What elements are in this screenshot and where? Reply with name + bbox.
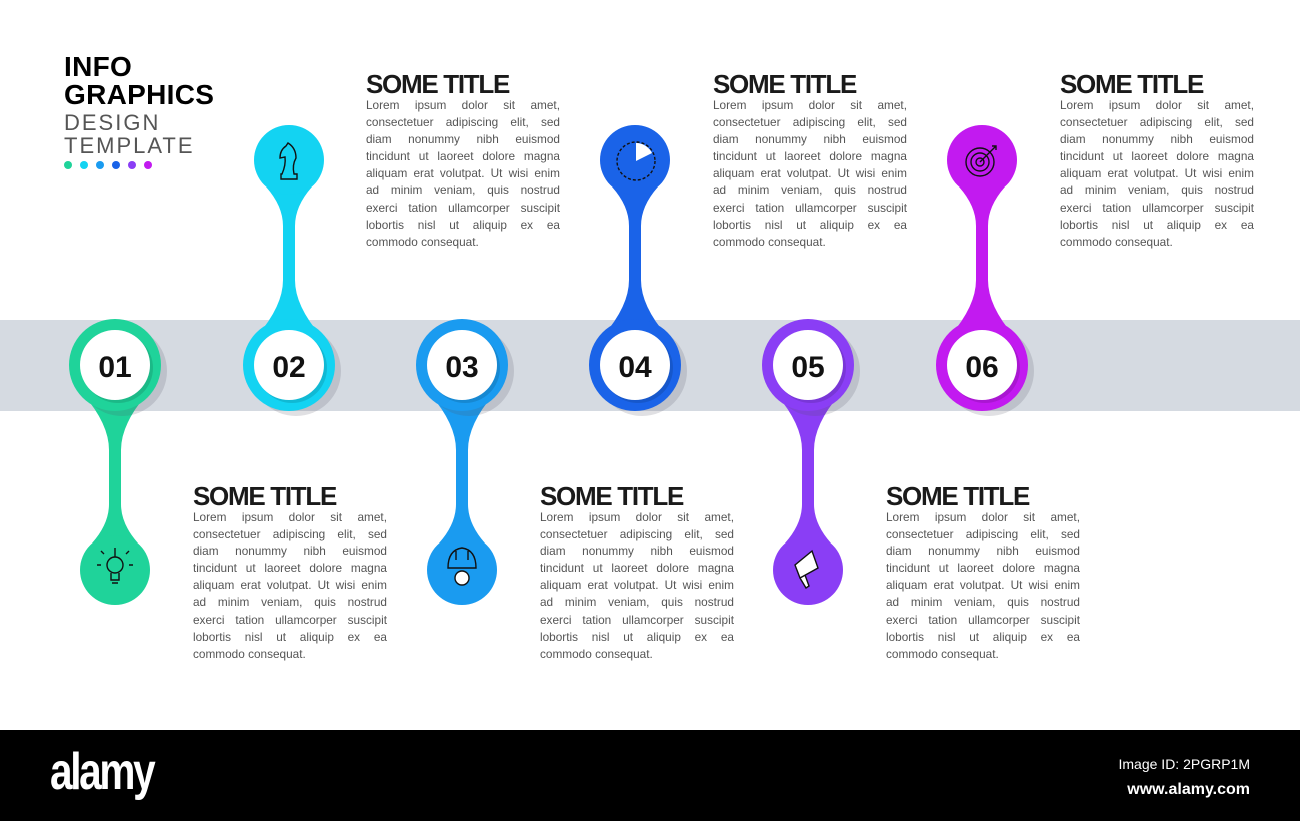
text block 04: ullamcorper [795,201,857,215]
text block 03: sit [677,510,689,524]
text block 04: dolore [829,149,862,163]
text block 05: laoreet [957,561,994,575]
text block 04: ea [894,218,907,232]
marker 06: 06 [965,351,999,384]
text block 01: laoreet [264,561,300,575]
text block 01: minim [218,595,249,609]
text block 06: nostrud [1215,183,1254,197]
text block 06: SOME TITLE [1060,69,1203,99]
text block 05: aliquam [886,578,927,592]
text block 05: ut [969,630,979,644]
text block 03: nonummy [582,544,634,558]
text block 06: ipsum [1109,98,1140,112]
logo: GRAPHICS [64,79,214,110]
text block 02: adipiscing [446,115,498,129]
text block 01: nostrud [348,595,387,609]
text block 06: suscipit [1215,201,1254,215]
text block 06: laoreet [1131,149,1168,163]
text block 02: ad [366,183,379,197]
text block 06: ea [1241,218,1254,232]
text block 02: minim [391,183,422,197]
text block 01: Ut [318,578,329,592]
text block 01: dolor [289,510,315,524]
text block 04: nisl [765,218,782,232]
text block 03: commodo consequat. [540,647,653,661]
text block 01: ad [193,595,206,609]
text block 06: commodo consequat. [1060,235,1173,249]
text block 06: enim [1228,166,1254,180]
text block 02: ullamcorper [448,201,510,215]
footer [0,730,1300,821]
text block 04: wisi [856,166,875,180]
text block 03: magna [698,561,734,575]
text block 05 [886,481,1080,661]
text block 04: minim [738,183,769,197]
logo: TEMPLATE [64,133,195,158]
text block 01 [193,481,387,661]
text block 05: SOME TITLE [886,481,1029,511]
text block 06: lobortis [1060,218,1098,232]
marker 05: 05 [791,351,825,384]
text block 03: nostrud [695,595,734,609]
text block 01: quis [314,595,336,609]
text block 02: Ut [491,166,502,180]
text block 04: ad [713,183,726,197]
text block 03: ut [593,561,603,575]
text block 02: veniam, [434,183,475,197]
text block 01: ullamcorper [275,613,337,627]
text block 05: consectetuer [886,527,954,541]
icon: target [966,146,996,176]
text block 04: lobortis [713,218,751,232]
text block 04: erat [760,166,781,180]
text block 04: commodo consequat. [713,235,826,249]
text block 05: nibh [996,544,1019,558]
text block 03: adipiscing [620,527,672,541]
text block 03: volutpat. [614,578,658,592]
text block 04: ut [796,218,806,232]
text block 05: erat [933,578,954,592]
text block 01: volutpat. [267,578,312,592]
text block 06: Ut [1185,166,1196,180]
text block 06: exerci [1060,201,1091,215]
text block 03: suscipit [695,613,734,627]
text block 05: enim [1054,578,1080,592]
text block 02: nostrud [521,183,560,197]
icon: megaphone [795,551,818,588]
text block 03: Lorem [540,510,573,524]
text block 02: sit [503,98,515,112]
footer id [1118,756,1250,798]
text block 03: nisl [592,630,609,644]
text block 03: ipsum [589,510,620,524]
text block 02: SOME TITLE [366,69,509,99]
text block 05: ex [1041,630,1053,644]
text block 06: wisi [1203,166,1222,180]
marker 06 [936,125,1034,416]
marker 04: 04 [618,351,652,384]
text block 03: elit, [684,527,703,541]
text block 03: amet, [704,510,734,524]
text block 01: consectetuer [193,527,261,541]
text block 02: laoreet [437,149,474,163]
text block 04: exerci [713,201,744,215]
text block 03: sed [715,527,734,541]
text block 04: veniam, [781,183,822,197]
text block 02: quis [487,183,509,197]
text block 02: tincidunt [366,149,410,163]
text block 01: exerci [193,613,224,627]
text block 06: Lorem [1060,98,1093,112]
text block 06: erat [1107,166,1128,180]
text block 05: ipsum [935,510,966,524]
text block 05: tincidunt [886,561,930,575]
text block 01: erat [240,578,261,592]
text block 05: suscipit [1041,613,1080,627]
text block 03: laoreet [611,561,648,575]
text block 02: tation [408,201,437,215]
icon: helmet gear [448,548,476,585]
text block 01: ut [276,630,286,644]
marker 01 [69,319,167,605]
text block 06: aliquip [1167,218,1201,232]
text block 02: dolore [482,149,515,163]
text block 05: euismod [1035,544,1080,558]
text block 06: ullamcorper [1142,201,1204,215]
text block 03: euismod [689,544,734,558]
text block 02: nibh [476,132,499,146]
text block 04: amet, [877,98,907,112]
logo [64,51,214,169]
text block 03: aliquip [647,630,681,644]
text block 01: wisi [336,578,355,592]
logo: INFO [64,51,132,82]
text block 03: Ut [665,578,676,592]
text block 04: Lorem [713,98,746,112]
text block 03: nibh [650,544,673,558]
marker 05 [762,319,860,605]
text block 04: quis [834,183,856,197]
text block 06: tincidunt [1060,149,1104,163]
text block 02: elit, [510,115,529,129]
text block 03: veniam, [608,595,649,609]
text block 04: enim [881,166,907,180]
text block 04: nibh [824,132,846,146]
text block 01: suscipit [348,613,387,627]
marker 01: 01 [98,351,132,384]
text block 01: tincidunt [193,561,237,575]
text block 06: sed [1235,115,1254,129]
text block 03: wisi [683,578,702,592]
text block 02: aliquip [473,218,507,232]
text block 02: ipsum [415,98,446,112]
text block 02: volutpat. [440,166,484,180]
text block 04: nostrud [868,183,907,197]
dots [64,161,152,169]
text block 01: ut [246,561,256,575]
text block 04: laoreet [784,149,820,163]
text block 06: ex [1215,218,1227,232]
text block 05: diam [886,544,912,558]
text block 06: dolore [1176,149,1209,163]
text block 04: diam [713,132,739,146]
text block 04: tincidunt [713,149,757,163]
text block 02: nonummy [408,132,460,146]
text block 02: consectetuer [366,115,434,129]
text block 02: magna [524,149,560,163]
text block 01: euismod [342,544,387,558]
text block 03 [540,481,734,661]
text block 04: suscipit [868,201,907,215]
text block 02: ut [449,218,459,232]
text block 02: diam [366,132,392,146]
text block 03: lobortis [540,630,578,644]
text block 05: nisl [938,630,955,644]
text block 06: diam [1060,132,1086,146]
text block 05: minim [911,595,942,609]
marker 02 [243,125,341,416]
text block 06: dolor [1156,98,1182,112]
text block 03: ut [623,630,633,644]
text block 06: veniam, [1128,183,1169,197]
text block 01: adipiscing [273,527,325,541]
text block 01: lobortis [193,630,231,644]
text block 03: diam [540,544,566,558]
text block 04: nonummy [755,132,807,146]
text block 01: tation [235,613,264,627]
text block 01: enim [361,578,387,592]
text block 05: nostrud [1041,595,1080,609]
text block 06: ut [1143,218,1153,232]
text block 01: dolore [309,561,342,575]
marker 04 [589,125,687,416]
text block 03: SOME TITLE [540,481,683,511]
text block 04: SOME TITLE [713,69,856,99]
text block 01: sed [368,527,387,541]
text block 04: aliquam [713,166,754,180]
text block 03: enim [708,578,734,592]
text block 04: sit [850,98,862,112]
text block 05: adipiscing [966,527,1018,541]
text block 05: Ut [1011,578,1022,592]
marker 02: 02 [272,351,306,384]
text block 01: elit, [337,527,356,541]
text block 06: euismod [1209,132,1254,146]
text block 02: exerci [366,201,397,215]
text block 06: ut [1113,149,1123,163]
text block 06: nibh [1170,132,1193,146]
text block 06: adipiscing [1140,115,1192,129]
text block 04: ut [766,149,776,163]
text block 01: commodo consequat. [193,647,306,661]
text block 01: ex [348,630,360,644]
text block 03: tincidunt [540,561,584,575]
text block 04: consectetuer [713,115,781,129]
text block 01: nonummy [235,544,287,558]
text block 03: exerci [540,613,571,627]
text block 04: ex [868,218,880,232]
text block 02: euismod [515,132,560,146]
text block 01: magna [351,561,387,575]
text block 04: adipiscing [793,115,845,129]
text block 02: enim [534,166,560,180]
text block 06: consectetuer [1060,115,1128,129]
text block 02: ex [521,218,533,232]
text block 04: sed [888,115,907,129]
text block 02 [366,69,560,249]
text block 05: wisi [1029,578,1048,592]
text block 02: sed [541,115,560,129]
text block 03: quis [661,595,683,609]
text block 06: quis [1181,183,1203,197]
text block 05: magna [1044,561,1080,575]
text block 01: nibh [304,544,326,558]
text block 04: euismod [862,132,907,146]
text block 04: elit, [857,115,876,129]
text block 03: ad [540,595,553,609]
text block 06: nonummy [1102,132,1154,146]
band [0,320,1300,411]
footer id: www.alamy.com [1127,781,1250,798]
text block 03: aliquam [540,578,581,592]
text block 06: magna [1218,149,1254,163]
text block 03: ullamcorper [622,613,684,627]
text block 02: lobortis [366,218,404,232]
text block 06: amet, [1224,98,1254,112]
text block 01: amet, [357,510,387,524]
text block 03: minim [565,595,596,609]
text block 06: volutpat. [1134,166,1178,180]
text block 04: tation [755,201,784,215]
text block 06: ad [1060,183,1073,197]
text block 01: SOME TITLE [193,481,336,511]
icon: bulb [97,548,133,583]
text block 05: ullamcorper [968,613,1030,627]
text block 02: ut [419,149,429,163]
text block 01: nisl [245,630,262,644]
text block 02: Lorem [366,98,399,112]
text block 05: ut [939,561,949,575]
text block 06: tation [1102,201,1131,215]
text block 02: wisi [509,166,528,180]
text block 04: ipsum [762,98,793,112]
footer id: Image ID: 2PGRP1M [1118,756,1250,772]
text block 05: dolor [982,510,1008,524]
text block 03: dolor [636,510,662,524]
text block 01: Lorem [193,510,226,524]
text block 01: ipsum [242,510,273,524]
text block 03: dolore [656,561,689,575]
text block 03: erat [587,578,608,592]
text block 01: diam [193,544,219,558]
text block 05: exerci [886,613,917,627]
text block 01: sit [330,510,342,524]
text block 06: minim [1085,183,1116,197]
text block 05: quis [1007,595,1029,609]
text block 04: volutpat. [787,166,832,180]
text block 05: sit [1023,510,1035,524]
text block 05: amet, [1050,510,1080,524]
text block 03: ea [721,630,734,644]
text block 05: commodo consequat. [886,647,999,661]
text block 02: ea [547,218,560,232]
text block 04: dolor [809,98,835,112]
text block 05: volutpat. [960,578,1004,592]
text block 05: aliquip [993,630,1027,644]
text block 04: magna [871,149,907,163]
text block 02: erat [413,166,434,180]
text block 02: aliquam [366,166,407,180]
text block 05: dolore [1002,561,1035,575]
text block 06: aliquam [1060,166,1101,180]
footer logo: alamy [50,743,153,801]
text block 01: ea [374,630,387,644]
text block 03: ex [695,630,707,644]
logo: DESIGN [64,110,160,135]
text block 05: sed [1061,527,1080,541]
text block 02: dolor [462,98,488,112]
text block 01: veniam, [261,595,302,609]
text block 02: amet, [530,98,560,112]
text block 05: tation [928,613,957,627]
text block 06 [1060,69,1254,249]
text block 05: lobortis [886,630,924,644]
text block 05: ea [1067,630,1080,644]
marker 03: 03 [445,351,479,384]
text block 04: Ut [838,166,849,180]
text block 05: ad [886,595,899,609]
icon: timer [617,142,655,180]
text block 06: nisl [1112,218,1129,232]
text block 02: suscipit [521,201,560,215]
text block 06: elit, [1204,115,1223,129]
text block 04: aliquip [820,218,854,232]
marker 03 [416,319,514,605]
text block 02: nisl [418,218,435,232]
text block 05: nonummy [928,544,980,558]
text block 03: tation [582,613,611,627]
text block 02: commodo consequat. [366,235,479,249]
text block 05: veniam, [954,595,995,609]
text block 01: aliquip [300,630,334,644]
text block 04 [713,69,907,249]
icon: knight [280,143,297,179]
text block 05: elit, [1030,527,1049,541]
text block 03: consectetuer [540,527,608,541]
text block 01: aliquam [193,578,234,592]
text block 05: Lorem [886,510,919,524]
text block 06: sit [1197,98,1209,112]
